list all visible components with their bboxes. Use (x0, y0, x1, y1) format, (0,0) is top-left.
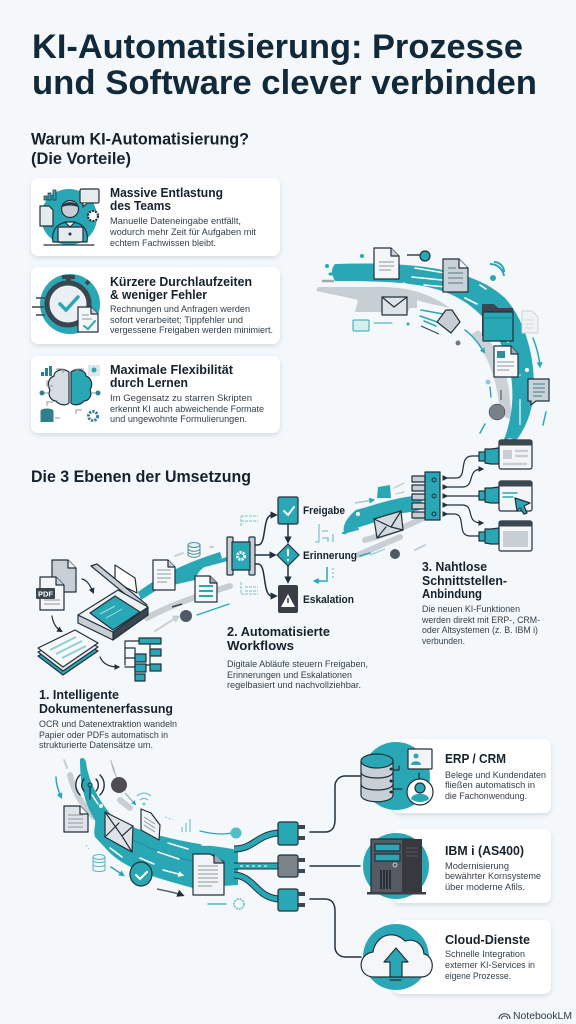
text: Cloud-Dienste: externer KI-Services in (445, 959, 535, 970)
text: Kürzere Durchlaufzeiten: Kürzere Durchlaufzeiten (110, 274, 252, 289)
illustration: document scanning (36, 560, 161, 681)
text: Maximale Flexibilität (110, 362, 264, 424)
title: und Software clever verbinden (32, 64, 537, 102)
label: 3. Nahtlose Schnittstellen-Anbindung (421, 559, 540, 646)
documents on ribbon (153, 560, 217, 602)
workflow flowchart: Erinnerung (303, 550, 357, 562)
heading: Vorteile (31, 130, 249, 168)
NotebookLM mark: NotebookLM (513, 1010, 572, 1022)
heading: Die 3 Ebenen: Die 3 Ebenen der Umsetzung (31, 468, 251, 486)
label: 1. Intelligente Dokumentenerfassung: Dokumentenerfassung (39, 701, 173, 716)
label: 2. Automatisierte Workflows: Workflows (227, 638, 294, 653)
icon: cloud upload (361, 924, 432, 990)
middle data ribbon (343, 483, 425, 559)
heading: Vorteile: Warum KI-Automatisierung? (31, 130, 249, 148)
text: Kürzere Durchlaufzeiten (110, 274, 273, 335)
text: IBM i: Modernisierung (445, 860, 509, 871)
label: 3. Nahtlose Schnittstellen-Anbindung: oder Altsystemen (z. B. IBM i) (422, 624, 538, 635)
label: 3. Nahtlose Schnittstellen-Anbindung: werden direkt mit ERP-, CRM- (421, 614, 540, 625)
label: 2. Automatisierte Workflows (227, 624, 368, 690)
text: ERP / CRM: fließen automatisch in (445, 779, 535, 790)
label: 3. Nahtlose Schnittstellen-Anbindung: Schnittstellen- (422, 573, 507, 588)
text: Kürzere Durchlaufzeiten: vergessene Freigaben werden minimiert. (110, 324, 273, 335)
text: Maximale Flexibilität: Maximale Flexibilität (110, 362, 234, 377)
text: IBM i (445, 843, 541, 892)
text: Maximale Flexibilität: durch Lernen (110, 375, 188, 390)
text: ERP / CRM: die Fachonwendung. (445, 790, 527, 801)
panel: Massive Entlastung des Teams (31, 178, 280, 256)
panel: Cloud-Dienste (361, 920, 551, 994)
icon: envelope (105, 812, 133, 852)
text: Massive Entlastung: Manuelle Dateneingabe entfällt, (110, 215, 241, 226)
text: ERP / CRM: Belege und Kundendaten (445, 769, 546, 780)
text: Cloud-Dienste: eigene Prozesse. (445, 970, 511, 981)
label: 3. Nahtlose Schnittstellen-Anbindung: verbunden. (422, 635, 465, 646)
label: 2. Automatisierte Workflows: 2. Automatisierte (227, 624, 330, 639)
text: Massive Entlastung (109, 185, 256, 248)
icon: brain with data nodes (40, 365, 100, 422)
label: 3. Nahtlose Schnittstellen-Anbindung: Anbindung (422, 586, 482, 601)
text: Kürzere Durchlaufzeiten: Rechnungen und Anfragen werden (110, 303, 250, 314)
label: 2. Automatisierte Workflows: regelbasiert und nachvollziehbar. (227, 679, 361, 690)
label: 2. Automatisierte Workflows: Erinnerungen und Eskalationen (227, 669, 352, 680)
text: IBM i: IBM i (AS400) (445, 843, 524, 858)
icon: envelope (374, 511, 403, 538)
title (32, 28, 537, 102)
text: ERP / CRM: ERP / CRM (445, 751, 506, 766)
panel: Maximale Flexibilität (31, 356, 280, 433)
text: Kürzere Durchlaufzeiten: & weniger Fehler (110, 287, 207, 302)
connector hub with application windows (412, 440, 532, 551)
text: Maximale Flexibilität: Im Gegensatz zu starren Skripten (110, 392, 252, 403)
workflow flowchart: Freigabe (303, 505, 345, 517)
icon: server (363, 833, 429, 899)
heading: Vorteile: (Die Vorteile) (31, 150, 131, 168)
text: Cloud-Dienste (445, 932, 535, 981)
label: 2. Automatisierte Workflows: Digitale Abläufe steuern Freigaben, (227, 658, 368, 669)
icon: antenna (76, 775, 104, 799)
text: Massive Entlastung: wodurch mehr Zeit für Aufgaben mit (109, 226, 256, 237)
workflow flowchart (138, 497, 357, 631)
icon: team member at laptop (40, 189, 99, 245)
icon: scanner (78, 564, 148, 640)
top data ribbon with documents (316, 248, 549, 450)
text: Massive Entlastung: echtem Fachwissen bleibt. (110, 237, 216, 248)
text: Kürzere Durchlaufzeiten: sofort verarbeitet; Tippfehler und (110, 314, 243, 325)
icon: gear node (227, 537, 255, 575)
label: 1. Intelligente Dokumentenerfassung: Papier oder PDFs automatisch in (39, 729, 168, 740)
panel: ERP / CRM (361, 739, 551, 813)
icon: stopwatch with document (32, 274, 100, 334)
bottom data ribbon with plugs (56, 758, 361, 957)
panel: Kürzere Durchlaufzeiten (31, 267, 280, 344)
label: 3. Nahtlose Schnittstellen-Anbindung: 3. Nahtlose (422, 559, 487, 574)
label: 1. Intelligente Dokumentenerfassung: 1. Intelligente (39, 687, 119, 702)
icon: structured data tree (125, 638, 161, 681)
icon: plugs (278, 822, 305, 911)
panel: IBM i (AS400) (363, 829, 551, 903)
text: Massive Entlastung: des Teams (110, 198, 171, 213)
workflow flowchart: Eskalation (303, 594, 354, 606)
label: 1. Intelligente Dokumentenerfassung: OCR und Datenextraktion wandeln (39, 718, 177, 729)
text: IBM i: über moderne Afils. (445, 881, 525, 892)
icon: database and contact (361, 742, 433, 810)
title: KI-Automatisierung: Prozesse (32, 28, 523, 66)
text: Maximale Flexibilität: und ungewohnte Formulierungen. (110, 413, 247, 424)
text: Maximale Flexibilität: erkennt KI auch abweichende Formate (110, 403, 264, 414)
illustration: document scanning: PDF (38, 590, 53, 598)
label: 1. Intelligente Dokumentenerfassung: strukturierte Datensätze um. (39, 739, 153, 750)
text: Cloud-Dienste: Schnelle Integration (445, 948, 525, 959)
text: Cloud-Dienste: Cloud-Dienste (445, 932, 530, 947)
label: 3. Nahtlose Schnittstellen-Anbindung: Die neuen KI-Funktionen (422, 603, 520, 614)
text: ERP / CRM (445, 751, 546, 801)
label: 1. Intelligente Dokumentenerfassung (39, 687, 177, 750)
text: Massive Entlastung: Massive Entlastung (110, 185, 223, 200)
text: IBM i: bewährter Kornsysteme (445, 870, 541, 881)
